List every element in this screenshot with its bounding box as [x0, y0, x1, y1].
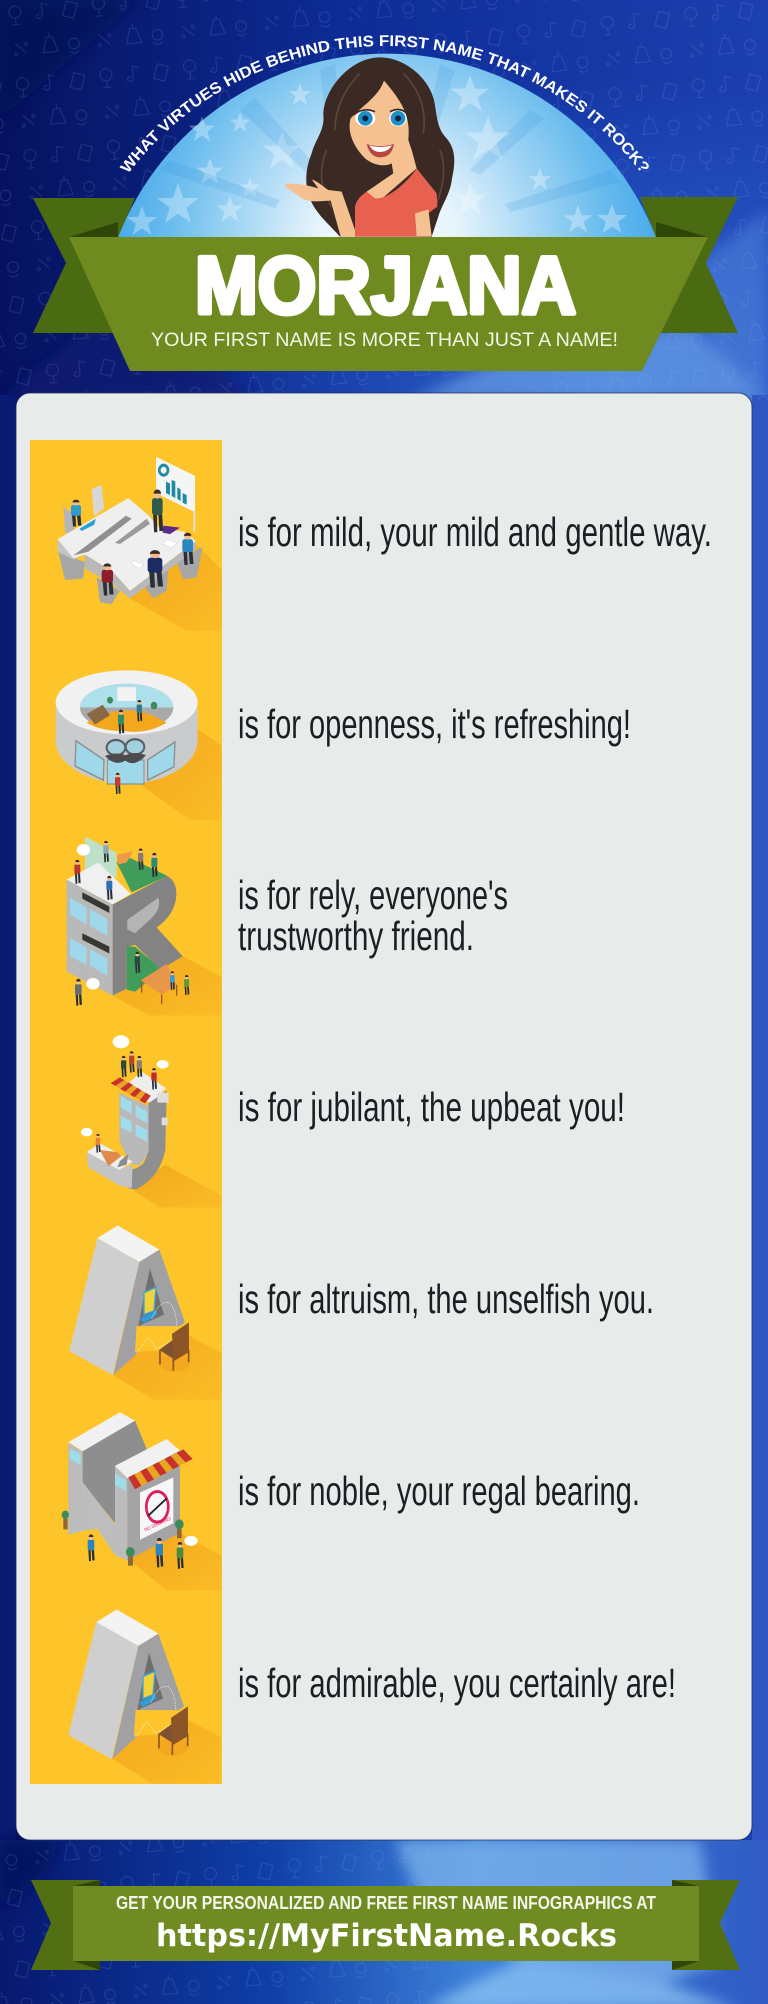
footer line: GET YOUR PERSONALIZED AND FREE FIRST NAME INFOGRAPHICS AT: [116, 1893, 656, 1913]
illustration: letter M meeting table: [58, 457, 222, 631]
text: R: [238, 872, 508, 959]
footer url: https://MyFirstName.Rocks: [156, 1918, 617, 1954]
name title: MORJANA: [195, 241, 576, 331]
dome with stars: [118, 54, 656, 237]
illustration: letter N shop: [62, 1412, 222, 1590]
illustration: letter O office: [56, 670, 222, 820]
ribbon front: [69, 237, 708, 371]
illustration: letter A: [69, 1226, 222, 1400]
curved tagline: WHAT VIRTUES HIDE BEHIND THIS FIRST NAME THAT MAKES IT ROCK?: [120, 35, 649, 172]
text: J: is for jubilant, the upbeat you!: [238, 1084, 625, 1130]
ribbon tails: [33, 197, 738, 333]
illustration: letter J building: [81, 1035, 222, 1208]
yellow strip: [30, 440, 222, 1784]
footer ribbon: [31, 1880, 740, 1970]
subtitle: YOUR FIRST NAME IS MORE THAN JUST A NAME!: [151, 329, 618, 351]
text: R: is for rely, everyone's: [238, 872, 508, 918]
illustration: letter A (second): [68, 1610, 221, 1784]
illustration: letter R building: [67, 836, 222, 1016]
character: woman with open hand: [284, 57, 454, 237]
illustration: letter N shop: NO SMOKING: [144, 1515, 172, 1533]
text: R: trustworthy friend.: [238, 913, 474, 959]
main panel: [16, 393, 752, 1840]
